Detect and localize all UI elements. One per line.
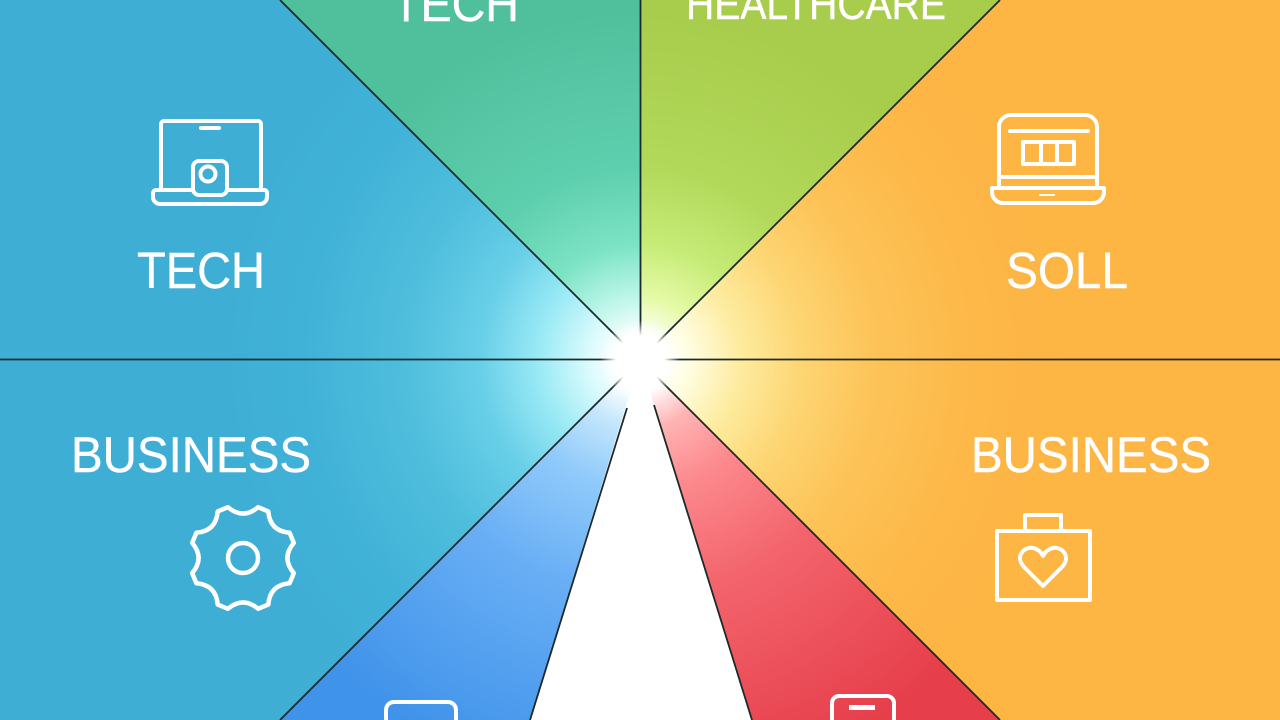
- panel: lower right orange wedge: [640, 360, 1280, 720]
- heading: left BUSINESS: BUSINESS: [71, 427, 311, 483]
- panel: bottom white wedge: [530, 360, 752, 720]
- icon: gear: [192, 507, 294, 609]
- panel: top lime wedge: [640, 0, 1000, 360]
- icon: briefcase with heart: [997, 515, 1090, 600]
- icon: laptop with chart: [992, 115, 1104, 203]
- icon: cropped laptop in blue wedge: [386, 702, 456, 720]
- icon: cropped device in red wedge: [832, 696, 894, 720]
- panel: lower left blue wedge: [0, 360, 640, 720]
- panel: bottom blue wedge: [280, 360, 640, 720]
- panel: upper right orange wedge: [640, 0, 1280, 360]
- panel: upper left blue wedge: [0, 0, 640, 360]
- heading: left TECH: TECH: [137, 242, 265, 299]
- heading: SOLL: SOLL: [1006, 242, 1128, 299]
- icon: laptop with camera: [153, 121, 267, 204]
- panel: bottom red wedge: [640, 360, 1000, 720]
- heading: right BUSINESS: BUSINESS: [971, 427, 1211, 483]
- panel: top green wedge: [280, 0, 640, 360]
